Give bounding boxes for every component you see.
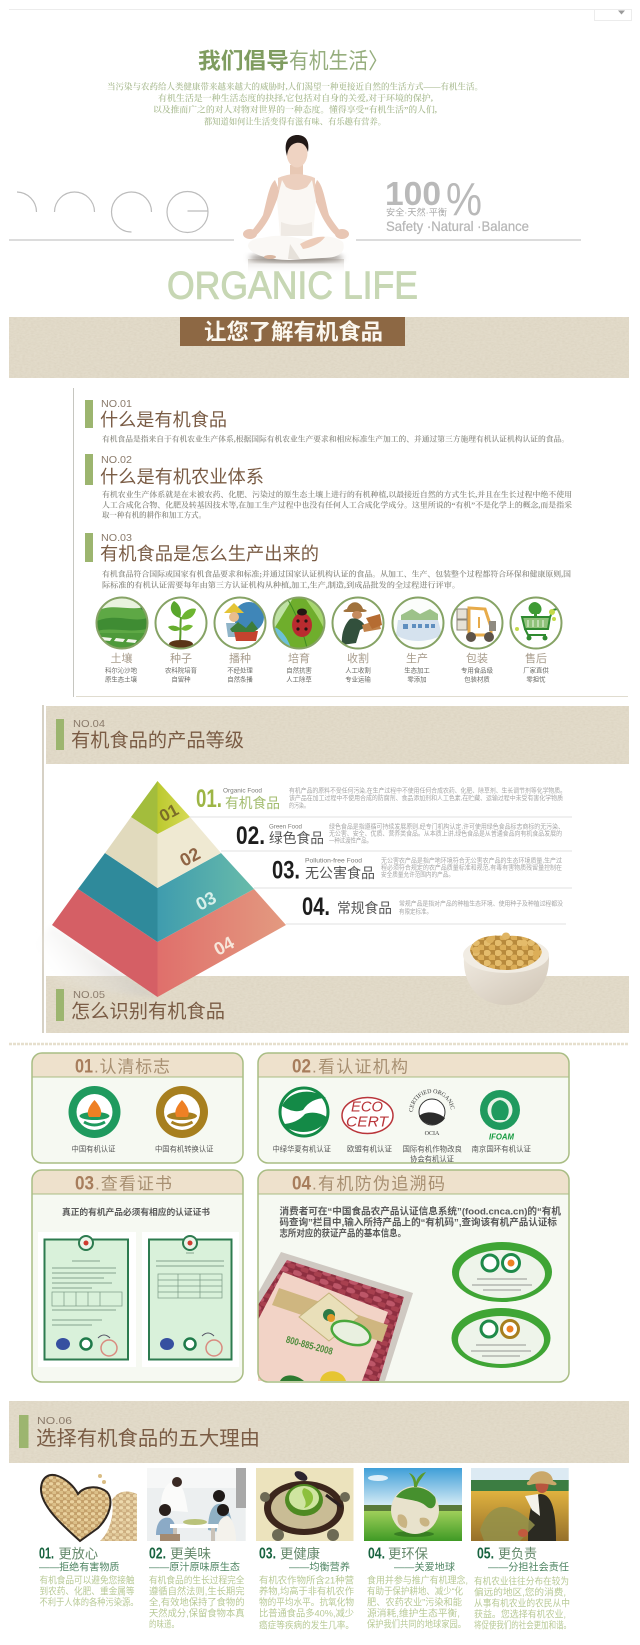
photo: family at table bbox=[147, 1468, 246, 1541]
intro paragraph bbox=[107, 82, 483, 126]
grade 03: pollution-free food: 无公害农产品是指产地环境符合无公害农产品的生态环境质量,生产过 bbox=[381, 856, 563, 864]
card: traceability code bbox=[258, 1170, 569, 1382]
reason 03: 更健康 bbox=[280, 1546, 320, 1562]
production steps labels: 不经处理 bbox=[227, 666, 253, 674]
section: NO.02: 有机农业生产体系就是在未被农药、化肥、污染过的原生态土壤上进行的有机种植,以最接近自然的方式生长,并且在生长过程中绝不使用 bbox=[102, 489, 572, 499]
card: check the certifier: 协会有机认证 bbox=[410, 1154, 455, 1164]
grade 02: green food: 无公害、安全、优质、营养类食品。从本质上讲,绿色食品是从普通食品向有机食品发展的 bbox=[329, 828, 562, 838]
reason 03: 比普通食品多40%,减少 bbox=[259, 1608, 354, 1618]
reason 03: 养物,均高于非有机农作 bbox=[259, 1586, 354, 1596]
grade 01: organic food bbox=[190, 785, 572, 817]
reason 03: 有机农作物所含21种营 bbox=[259, 1574, 354, 1586]
frame line: grades section bbox=[42, 705, 44, 1033]
photo: green tea bowl bbox=[256, 1468, 354, 1541]
heading: organic life advocacy bbox=[198, 48, 388, 74]
card: check the certifier: .看认证机构 bbox=[312, 1058, 408, 1076]
production steps labels: 厂家直供 bbox=[523, 666, 549, 674]
100% badge: 安全·天然·平衡 bbox=[386, 206, 447, 218]
card: traceability code: 04 bbox=[292, 1174, 311, 1194]
banner: learn about organic food: 让您了解有机食品 bbox=[204, 320, 383, 344]
reason 01: 到农药、化肥、重金属等 bbox=[40, 1586, 134, 1596]
reason 01: 更放心 bbox=[58, 1546, 98, 1562]
reason 05: 有机农业往往分布在较为 bbox=[474, 1576, 569, 1586]
grade 03: pollution-free food: 程必须符合规定的农产品质量标准和规范,有毒有害物质残留量控制在 bbox=[381, 862, 562, 872]
grade 02: green food: Green Food bbox=[269, 824, 302, 830]
grade 02: green food bbox=[221, 822, 572, 851]
section: NO.03: 际标准的有机认证需要每年由第三方认证机构从种植,加工,生产,制造,到成品批发的全过程进行评审。 bbox=[102, 580, 460, 590]
reason 02: 遵循自然法则,生长期完 bbox=[149, 1586, 244, 1596]
grade 04: conventional food: 有限定标准。 bbox=[399, 906, 432, 916]
section: NO.03: 有机食品符合国际或国家有机食品要求和标准;并通过国家认证机构认证的食品。从加工、生产、包装整个过程都符合环保和健康原则,国 bbox=[102, 568, 571, 578]
browser dropdown remnant bbox=[9, 10, 632, 20]
yoga woman figure bbox=[243, 135, 349, 275]
icon: harvesting farmer bbox=[332, 598, 384, 648]
reason 04: 源消耗,维护生态平衡, bbox=[367, 1608, 460, 1618]
reason 02: 02. bbox=[149, 1546, 166, 1562]
pyramid chart bbox=[28, 781, 286, 997]
section: NO.02 bbox=[85, 454, 572, 520]
grade 02: green food: 绿色食品 bbox=[269, 830, 324, 846]
100% badge: % bbox=[446, 173, 482, 225]
grade 01: organic food: 01. bbox=[196, 785, 222, 813]
banner: NO.06 five reasons bbox=[9, 1401, 629, 1463]
photo: farmer with rice bbox=[471, 1468, 569, 1541]
logo: IFOAM: IFOAM bbox=[489, 1132, 514, 1142]
production steps labels: 农科院培育 bbox=[165, 666, 198, 674]
production steps labels: 零担忧 bbox=[526, 674, 546, 684]
reason 02: 全,有效地保持了食物的 bbox=[149, 1596, 244, 1608]
reason 04: 肥、农药农业”污染和能 bbox=[367, 1596, 463, 1608]
production steps labels: 包装材质 bbox=[464, 674, 490, 684]
production steps labels: 专用食品级 bbox=[461, 666, 494, 674]
section: NO.02: 什么是有机农业体系 bbox=[100, 467, 264, 487]
reason 01: 不利于人体的各种污染源。 bbox=[40, 1596, 138, 1608]
logo: IFOAM bbox=[480, 1090, 520, 1142]
icon: ladybug on leaf bbox=[274, 598, 324, 648]
reason 05: 从事有机农业的农民从中 bbox=[474, 1598, 570, 1608]
card: recognise the marks: 中国有机转换认证 bbox=[155, 1144, 214, 1154]
reason 05: 更负责 bbox=[498, 1546, 537, 1562]
card: traceability code: 码查询”栏目中,输入所持产品上的“有机码”,查询该有机产品认证标 bbox=[280, 1216, 557, 1228]
reason 02: 更美味 bbox=[170, 1546, 211, 1562]
grade 03: pollution-free food: 无公害食品 bbox=[305, 865, 375, 881]
grade 02: green food: 绿色食品是指遵循可持续发展原则,经专门机构认定,许可使用绿色食品标志商标的无污染、 bbox=[329, 822, 564, 830]
section: NO.03: 有机食品是怎么生产出来的 bbox=[100, 544, 319, 564]
reason 03 bbox=[259, 1546, 354, 1630]
production steps labels: 土壤 bbox=[110, 651, 132, 665]
card: view the certificate: .查看证书 bbox=[95, 1174, 172, 1194]
photo: packaged product: 800-885-2008 bbox=[285, 1335, 334, 1358]
grade 04: conventional food: 常规食品 bbox=[337, 900, 392, 916]
reason 01: 01. bbox=[39, 1546, 54, 1562]
grade 02: green food: 一种过渡性产品。 bbox=[329, 836, 372, 844]
production steps labels: 包装 bbox=[466, 652, 488, 665]
banner: NO.04: NO.04 bbox=[73, 718, 105, 730]
reason 04: 保护我们共同的地球家园。 bbox=[367, 1618, 466, 1630]
card: recognise the marks bbox=[32, 1053, 243, 1163]
card: view the certificate: 真正的有机产品必须有相应的认证证书 bbox=[62, 1206, 210, 1217]
reason 01: 有机食品可以避免您接触 bbox=[40, 1574, 135, 1586]
card: check the certifier bbox=[257, 1052, 570, 1164]
label: conversion code sticker bbox=[452, 1308, 550, 1368]
grade 03: pollution-free food bbox=[254, 856, 572, 888]
production steps labels: 培育 bbox=[288, 651, 310, 665]
icon: China organic seal bbox=[68, 1086, 120, 1138]
section: NO.01: 有机食品是指来自于有机农业生产体系,根据国际有机农业生产要求和相应标准生产加工的、并通过第三方施理有机认证机构认证的食品。 bbox=[102, 434, 569, 444]
grade 04: conventional food: 04. bbox=[302, 893, 330, 921]
reason 02: 的味道。 bbox=[149, 1618, 179, 1630]
production steps labels: 自然条播 bbox=[227, 674, 253, 684]
icon: seedling bbox=[156, 598, 206, 648]
banner: NO.04: 有机食品的产品等级 bbox=[71, 730, 244, 752]
logo: China Green Huaxia bbox=[280, 1088, 328, 1136]
horizon lines bbox=[9, 239, 581, 241]
grade 04: conventional food: 常规产品是指对产品的种植生态环境、使用种子及种植过程都没 bbox=[399, 898, 564, 908]
reason 02: 天然成分,保留食物本真 bbox=[149, 1608, 244, 1618]
reason 04: 04. bbox=[368, 1546, 385, 1562]
card: view the certificate: 03 bbox=[75, 1174, 94, 1194]
banner: NO.04 bbox=[46, 706, 629, 764]
reason 02: ——原汁原味原生态 bbox=[149, 1560, 240, 1574]
pyramid chart: 04 bbox=[210, 932, 238, 960]
frame lines: knowledge section bbox=[74, 388, 628, 697]
reason 02 bbox=[149, 1546, 245, 1630]
section: NO.02: NO.02 bbox=[101, 454, 132, 466]
card: check the certifier: 欧盟有机认证 bbox=[347, 1144, 393, 1154]
reason 04: ——关爱地球 bbox=[394, 1560, 455, 1574]
reason 01 bbox=[39, 1546, 138, 1608]
icon: soil bbox=[96, 598, 148, 648]
production steps labels: 生产 bbox=[406, 651, 428, 665]
card: traceability code: 消费者可在“中国食品农产品认证信息系统”(food.cnca.cn)的“有机 bbox=[280, 1206, 561, 1218]
reason 05: 将促使我们的社会更加和谐。 bbox=[474, 1620, 571, 1630]
section: NO.01: 什么是有机食品 bbox=[100, 410, 227, 430]
100% badge: Safety ·Natural ·Balance bbox=[386, 218, 529, 234]
photo: soybean heart bbox=[41, 1474, 137, 1541]
heading: organic life advocacy: 我们倡导 bbox=[198, 48, 289, 74]
logo: OCIA bbox=[409, 1089, 455, 1137]
card: recognise the marks: 01 bbox=[75, 1056, 93, 1078]
card: check the certifier: 中绿华夏有机认证 bbox=[272, 1144, 332, 1154]
logo: ECOCERT: ECO bbox=[351, 1098, 383, 1116]
organic life wordmark: ORGANIC LIFE bbox=[167, 264, 418, 308]
intro paragraph: 当污染与农药给人类健康带来越来越大的威胁时,人们渴望一种更接近自然的生活方式——有机生活。 bbox=[107, 82, 483, 92]
card: traceability code: 志所对应的获证产品的基本信息。 bbox=[280, 1228, 406, 1240]
intro paragraph: 以及推而广之的对人对物对世界的一种态度。懂得享受“有机生活”的人们, bbox=[153, 104, 437, 114]
banner: NO.06 five reasons: 选择有机食品的五大理由 bbox=[36, 1427, 260, 1450]
production steps labels: 专业运输 bbox=[345, 674, 371, 684]
100% badge: 100 bbox=[385, 175, 441, 212]
reason 02: 有机食品的生长过程完全 bbox=[149, 1574, 245, 1586]
production steps labels: 自留种 bbox=[171, 674, 191, 684]
grade 02: green food: 02. bbox=[236, 822, 265, 850]
grade 03: pollution-free food: 03. bbox=[272, 856, 300, 884]
dotted section divider bbox=[9, 1043, 629, 1045]
certificate front bbox=[38, 1232, 136, 1367]
reason 04: 有助于保护耕地、减少“化 bbox=[367, 1586, 463, 1596]
logo: ECOCERT: CERT bbox=[346, 1114, 390, 1130]
moon phase arcs bbox=[17, 192, 208, 232]
production steps labels: 播种 bbox=[229, 651, 251, 665]
card: recognise the marks: 中国有机认证 bbox=[72, 1144, 116, 1154]
banner: NO.05: NO.05 bbox=[73, 989, 105, 1001]
reason 04: 更环保 bbox=[388, 1546, 429, 1562]
grade 01: organic food: 的污染。 bbox=[289, 800, 309, 810]
production steps labels: 原生态土壤 bbox=[105, 674, 138, 684]
banner: learn about organic food bbox=[9, 317, 629, 378]
section: NO.01 bbox=[85, 398, 569, 444]
reason 03: 03. bbox=[259, 1546, 276, 1562]
reason 04: 食用并参与推广有机理念, bbox=[367, 1574, 468, 1586]
card: check the certifier: 国际有机作物改良 bbox=[402, 1144, 462, 1154]
section: NO.01: NO.01 bbox=[101, 398, 132, 410]
card: recognise the marks: .认清标志 bbox=[94, 1058, 170, 1076]
pyramid chart: 01 bbox=[156, 800, 182, 826]
grade 01: organic food: 有机产品的原料不受任何污染,在生产过程中不使用任何合成农药、化肥、除草剂、生长调节剂等化学物质。 bbox=[289, 786, 566, 794]
icon: forklift packaging bbox=[452, 598, 502, 648]
banner: NO.05: 怎么识别有机食品 bbox=[71, 1000, 225, 1022]
card: view the certificate bbox=[32, 1170, 243, 1382]
production steps labels: 人工收割 bbox=[345, 666, 371, 674]
reason 01: ——拒绝有害物质 bbox=[39, 1560, 120, 1574]
production steps labels: 种子 bbox=[170, 651, 192, 665]
logo: ECOCERT bbox=[342, 1098, 393, 1134]
reason 05: 偏远的地区,您的消费, bbox=[474, 1586, 566, 1598]
100% badge bbox=[385, 173, 529, 234]
reason 03: 癌症等疾病的发生几率。 bbox=[259, 1620, 354, 1630]
photo: packaged product bbox=[258, 1252, 413, 1381]
intro paragraph: 有机生活是一种生活态度的抉择,它包括对自身的关爱,对于环境的保护, bbox=[158, 93, 433, 103]
label: organic code sticker bbox=[452, 1242, 552, 1302]
pyramid chart: 02 bbox=[176, 843, 204, 871]
reason 05: ——分担社会责任 bbox=[488, 1560, 569, 1574]
photo: earth egg in field bbox=[364, 1468, 462, 1541]
production steps labels bbox=[105, 651, 549, 684]
reason 03: 物的平均水平。抗氧化物 bbox=[259, 1596, 354, 1608]
grade 04: conventional food bbox=[286, 893, 566, 924]
illustration: bowl of soybeans bbox=[463, 932, 549, 1005]
card: traceability code: .有机防伪追溯码 bbox=[312, 1174, 445, 1194]
icon: shopping cart bbox=[510, 598, 562, 648]
production steps labels: 生态加工 bbox=[404, 666, 430, 674]
icon: sowing farmer bbox=[214, 598, 266, 648]
icon: China conversion seal bbox=[156, 1086, 208, 1138]
production steps labels: 收割 bbox=[347, 651, 369, 665]
production steps labels: 人工除草 bbox=[286, 674, 312, 684]
card: check the certifier: 南京国环有机认证 bbox=[472, 1144, 532, 1154]
production steps labels: 科尔沁沙地 bbox=[105, 666, 138, 674]
intro paragraph: 都知道如何让生活变得有滋有味、有乐趣有营养。 bbox=[204, 116, 386, 126]
reason 05 bbox=[474, 1546, 571, 1630]
production steps labels: 零添加 bbox=[407, 674, 427, 684]
reason 05: 获益。您选择有机农业, bbox=[474, 1608, 566, 1620]
grade 01: organic food: Organic Food bbox=[223, 788, 263, 794]
banner: NO.06 five reasons: NO.06 bbox=[37, 1415, 72, 1427]
pyramid chart: 03 bbox=[192, 887, 220, 915]
section: NO.02: 人工合成化合物、化肥及转基因技术等,在加工生产过程中也没有任何人工合成化学成分。这里所说的“有机”不是化学上的概念,而是指采 bbox=[102, 500, 572, 510]
certificate back bbox=[142, 1232, 239, 1367]
section: NO.03 bbox=[85, 532, 571, 590]
production steps labels: 售后 bbox=[525, 651, 547, 665]
card: check the certifier: 02 bbox=[292, 1056, 311, 1078]
grade 01: organic food: 有机食品 bbox=[225, 795, 280, 811]
reason 05: 05. bbox=[477, 1546, 494, 1562]
banner: NO.05 bbox=[46, 976, 629, 1033]
section: NO.03: NO.03 bbox=[101, 532, 132, 544]
reason 03: ——均衡营养 bbox=[289, 1560, 350, 1574]
section: NO.02: 取一种有机的耕作和加工方式。 bbox=[102, 510, 206, 520]
logo: OCIA: CERTIFIED ORGANIC bbox=[409, 1089, 455, 1112]
production steps labels: 自然抗害 bbox=[286, 666, 312, 674]
grade 03: pollution-free food: Pollution-free Food bbox=[305, 858, 363, 864]
icon: eco factory bbox=[392, 598, 444, 648]
logo: OCIA: OCIA bbox=[425, 1131, 440, 1137]
reason 04 bbox=[367, 1546, 468, 1630]
heading: organic life advocacy: 有机生活〉 bbox=[289, 48, 388, 74]
grade 03: pollution-free food: 安全质量允许范围内的产品。 bbox=[381, 870, 454, 878]
grade 01: organic food: 该产品在加工过程中不使用合成的防腐剂、食品添加剂和人工色素,在贮藏、运输过程中未受有害化学物质 bbox=[289, 793, 563, 802]
